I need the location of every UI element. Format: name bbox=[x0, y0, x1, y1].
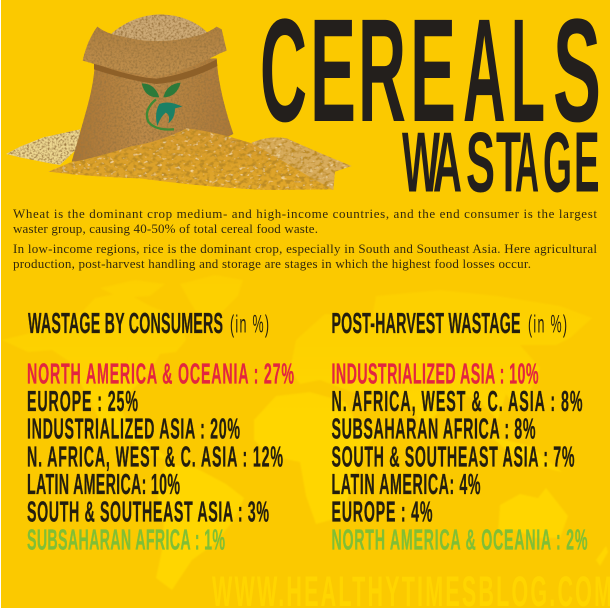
list: wastage by consumers: SOUTH & SOUTHEAST ASIA : 3% bbox=[27, 496, 269, 528]
subtitle: WASTAGE: T bbox=[496, 116, 521, 210]
subtitle: WASTAGE: W bbox=[402, 116, 440, 210]
logo on sack bbox=[142, 83, 182, 130]
list: post-harvest wastage: EUROPE : 4% bbox=[332, 496, 432, 528]
heading: wastage by consumers: WASTAGE BY CONSUMERS bbox=[28, 308, 223, 339]
list: wastage by consumers: NORTH AMERICA & OCEANIA : 27% bbox=[27, 358, 294, 390]
list: post-harvest wastage: SOUTH & SOUTHEAST ASIA : 7% bbox=[332, 441, 574, 473]
subtitle: WASTAGE: G bbox=[543, 116, 572, 210]
list: wastage by consumers: SUBSAHARAN AFRICA : 1% bbox=[27, 524, 225, 556]
intro text: Wheat is the dominant crop medium- and high-income countries, and the end consumer is the largest bbox=[13, 206, 597, 221]
list: wastage by consumers: INDUSTRIALIZED ASIA : 20% bbox=[27, 413, 240, 445]
sack body bbox=[72, 58, 233, 162]
sack cuff bbox=[83, 27, 227, 77]
sack cuff shadow bbox=[94, 59, 217, 84]
subtitle: WASTAGE: A bbox=[515, 116, 539, 210]
intro text: In low-income regions, rice is the dominant crop, especially in South and Southeast Asia. Here agricultural bbox=[13, 241, 597, 256]
intro text: waster group, causing 40-50% of total cereal food waste. bbox=[13, 221, 318, 236]
list: post-harvest wastage: INDUSTRIALIZED ASIA : 10% bbox=[332, 358, 538, 390]
list: post-harvest wastage: NORTH AMERICA & OCEANIA : 2% bbox=[332, 524, 588, 556]
heading: wastage by consumers: (in %) bbox=[230, 311, 269, 339]
grain pile bbox=[48, 128, 333, 190]
list: wastage by consumers: EUROPE : 25% bbox=[27, 386, 138, 417]
list: wastage by consumers: N. AFRICA, WEST & C. ASIA : 12% bbox=[27, 441, 283, 473]
subtitle: WASTAGE: S bbox=[466, 116, 495, 210]
subtitle: WASTAGE: A bbox=[433, 116, 462, 210]
list: post-harvest wastage: LATIN AMERICA: 4% bbox=[332, 469, 480, 500]
wheat ears left bbox=[6, 129, 80, 165]
list: post-harvest wastage bbox=[332, 358, 588, 556]
illustration: sack of grain bbox=[6, 14, 352, 190]
heading: post-harvest wastage: POST-HARVEST WASTAGE bbox=[332, 308, 520, 339]
title: CEREALS bbox=[260, 0, 601, 153]
list: post-harvest wastage: N. AFRICA, WEST & C. ASIA : 8% bbox=[332, 386, 582, 417]
wheat ears right bbox=[252, 137, 352, 190]
intro text: production, post-harvest handling and storage are stages in which the highest food losses occur. bbox=[13, 256, 531, 271]
grain mound in sack bbox=[112, 14, 208, 45]
list: post-harvest wastage: SUBSAHARAN AFRICA : 8% bbox=[332, 413, 536, 445]
heading: post-harvest wastage: (in %) bbox=[528, 311, 567, 339]
subtitle: WASTAGE bbox=[402, 116, 600, 210]
list: wastage by consumers: LATIN AMERICA: 10% bbox=[27, 469, 180, 500]
intro text bbox=[13, 206, 597, 271]
list: wastage by consumers bbox=[27, 358, 294, 556]
world map backdrop bbox=[2, 275, 608, 590]
